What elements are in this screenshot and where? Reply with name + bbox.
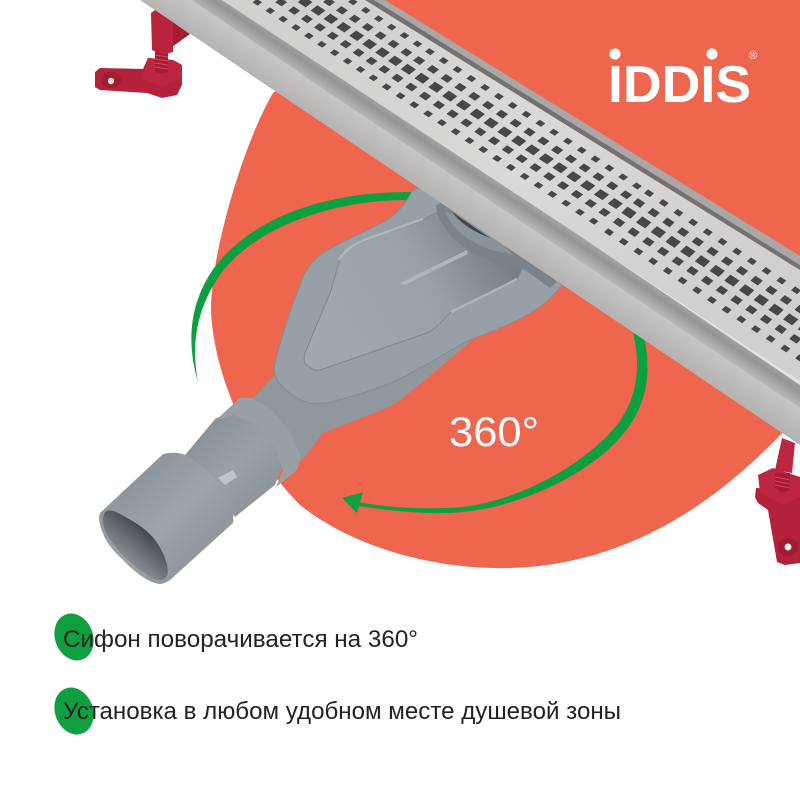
green bullet one [48, 608, 100, 666]
IDDIS logo: ® [749, 50, 757, 62]
siphon collar [216, 398, 301, 487]
siphon port ring [445, 212, 512, 254]
perforated plate [222, 0, 800, 381]
channel lower side face [140, 0, 800, 445]
perforations middle part [382, 49, 641, 224]
red mounting foot: left [95, 10, 190, 98]
grey siphon [99, 180, 570, 584]
channel upper rim groove [365, 0, 800, 270]
perforations left part [150, 0, 421, 81]
orange background blob [211, 0, 800, 568]
siphon port [436, 190, 570, 288]
siphon opening [103, 510, 168, 580]
siphon raised ribs [339, 219, 517, 312]
channel mid face [191, 0, 800, 408]
green bullet two [48, 682, 100, 740]
bullet item: installation anywhere [48, 682, 621, 740]
green rotation arrow: lower [342, 333, 647, 513]
siphon port shadow [452, 212, 490, 238]
bullet item: siphon rotates [48, 608, 418, 666]
siphon wide end [99, 453, 233, 584]
channel highlight line [222, 0, 800, 385]
siphon flange [274, 180, 562, 404]
channel upper rim [374, 0, 800, 265]
bullet item: installation anywhere: Установка в любом удобном месте душевой зоны [63, 698, 621, 725]
siphon tube highlight [218, 470, 237, 485]
label: 360 degrees: 360° [449, 408, 539, 455]
siphon body under flange [253, 330, 470, 462]
perforations right part [604, 190, 800, 426]
stainless steel drain channel [140, 0, 800, 445]
bullet item: siphon rotates: Сифон поворачивается на 360° [63, 626, 418, 653]
siphon centre rib [400, 250, 468, 285]
red mounting foot: right [755, 438, 800, 565]
IDDIS logo: IDDIS [608, 56, 751, 114]
green rotation arc: upper [191, 192, 415, 382]
siphon narrow tube [185, 408, 285, 517]
siphon inner shield [304, 200, 530, 370]
